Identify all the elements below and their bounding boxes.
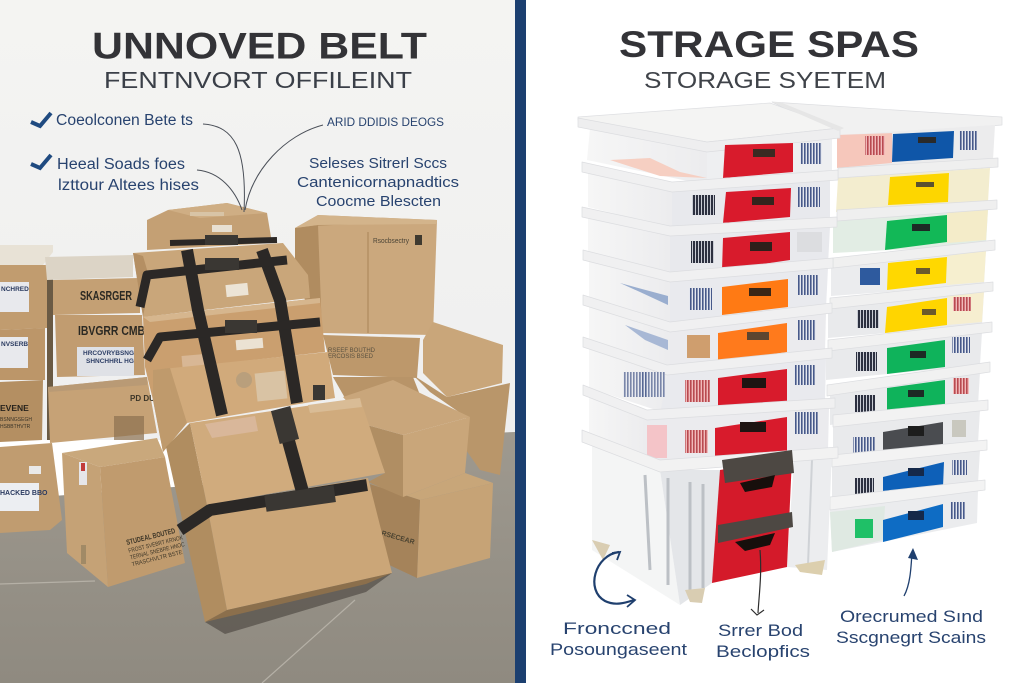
- left callouts: Heeal Soads foes: [57, 156, 185, 173]
- box: left stack column one: HSBBTHVTR: [0, 424, 31, 430]
- box: left stack column one: NVSERB: [1, 341, 28, 348]
- box: lower right: [367, 473, 493, 578]
- box: left stack column two: SKASRGER: [80, 289, 132, 303]
- callout: check one: [31, 113, 51, 126]
- label: left: Fronccned: [563, 619, 671, 638]
- box: front left studeal: TERNAL SNEBRE HNOC: [130, 542, 186, 561]
- left heading: FENTNVORT OFFILEINT: [104, 67, 412, 93]
- right labels: [550, 607, 986, 661]
- left panel wall: [0, 0, 515, 440]
- right labels: Beclopfics: [716, 642, 810, 661]
- bin: left 1 red: [578, 103, 840, 185]
- bin: left 3 red: [582, 207, 837, 280]
- bin: right 7 green: [827, 362, 990, 425]
- box: front left studeal: STUDEAL BOUTED: [125, 526, 176, 547]
- straps: [140, 240, 367, 530]
- box: right back large: [295, 215, 437, 335]
- arrow: middle: [751, 550, 764, 615]
- box: stack middle: [143, 298, 325, 400]
- drawer handle lower: [718, 512, 793, 543]
- right heading: [619, 24, 919, 93]
- box: left stack column two: IBVGRR CMB: [78, 323, 145, 338]
- label: middle: Srrer Bod: [718, 621, 803, 640]
- box: under large: ERCOSIS BSED: [328, 354, 374, 360]
- drawer handle upper: [722, 450, 794, 483]
- strap across lids: [772, 102, 844, 131]
- callout: check two: [31, 155, 51, 168]
- box: left stack column one: BSNNGSEGH: [0, 417, 32, 423]
- left heading: [92, 26, 427, 93]
- bin: right 6 green: [826, 322, 992, 380]
- box: left stack column two: SHNCHHRL HG: [86, 358, 134, 365]
- box: left stack column one: [0, 245, 62, 533]
- arrow: right: [904, 548, 918, 596]
- bin: right 2 yellow: [836, 158, 998, 212]
- box: top of stack: [147, 203, 272, 250]
- box: left stack column one: EVENE: [0, 403, 29, 413]
- divider bar: [515, 0, 526, 683]
- box: far right lower: [413, 375, 510, 475]
- box: under large: [323, 335, 420, 378]
- box: left stack column one: NCHRED: [1, 286, 29, 293]
- box: front left studeal: FROST SVEBRT KRNOK: [128, 535, 184, 555]
- bin: left 8 large with handles: [582, 430, 838, 605]
- box: lower right: RSECEAR: [380, 530, 415, 546]
- bin: right 5 yellow: [828, 282, 993, 338]
- bin: left 6 red: [583, 337, 832, 415]
- right heading: STRAGE SPAS: [619, 24, 919, 65]
- bin: left 2 red: [582, 162, 838, 232]
- left callouts: Seleses Sitrerl Sccs: [309, 155, 447, 172]
- arrow: left curved: [594, 552, 635, 607]
- box: far right upper: [423, 322, 503, 397]
- box: left stack column one: HACKED BBO: [0, 490, 48, 497]
- bin: right 10 blue: [830, 480, 985, 552]
- box: left stack column two: HRCOVRYBSNG: [83, 350, 134, 357]
- left panel concrete floor: [0, 432, 515, 683]
- box: low behind: [333, 377, 420, 398]
- left callouts: Cantenicornapnadtics: [297, 174, 459, 191]
- bin: left 5 orange: [583, 295, 832, 370]
- right labels: Sscgnegrt Scains: [836, 628, 986, 647]
- box: stack upper: [133, 243, 310, 317]
- left callouts: Coocme Blescten: [316, 193, 441, 210]
- left heading: UNNOVED BELT: [92, 26, 427, 66]
- box: left stack column two: [45, 255, 161, 443]
- box: stack lower: [153, 352, 335, 452]
- box: right back large: Rsocbsectry: [373, 238, 409, 245]
- left callouts: Coeolconen Bete ts: [56, 112, 193, 129]
- bin: right 4 yellow: [831, 240, 995, 296]
- box: front large: [166, 398, 392, 622]
- bin: right 8 dark: [833, 400, 988, 462]
- bin: right 3 green: [833, 200, 997, 253]
- left callouts: lzttour Altees hises: [58, 177, 199, 194]
- right heading: STORAGE SYETEM: [644, 67, 886, 93]
- bin: right 1 blue: [772, 102, 1002, 168]
- left callouts: [31, 112, 459, 210]
- right labels: Posoungaseent: [550, 640, 687, 659]
- buckles: [205, 235, 336, 512]
- bin: left 4 orange: [583, 250, 833, 326]
- box: small open: [343, 380, 470, 497]
- storage right column: [772, 102, 1002, 552]
- box: front left studeal: [62, 438, 188, 587]
- box: left stack column two: PD DUU: [130, 394, 161, 403]
- storage left column: [578, 102, 844, 605]
- box: front left studeal: TRASCHVLTR BSTE: [131, 550, 183, 568]
- label: right: Orecrumed Sınd: [840, 607, 983, 626]
- cardboard box pile: [0, 203, 510, 622]
- box: under large: RSEEF BOUTHD: [328, 348, 376, 354]
- right panel background: [526, 0, 1024, 683]
- bin: right 9 blue: [832, 440, 987, 503]
- bin: left 7 red: [583, 385, 835, 466]
- left leader lines: [197, 124, 323, 212]
- left callouts: ARID DDIDIS DEOGS: [327, 115, 444, 129]
